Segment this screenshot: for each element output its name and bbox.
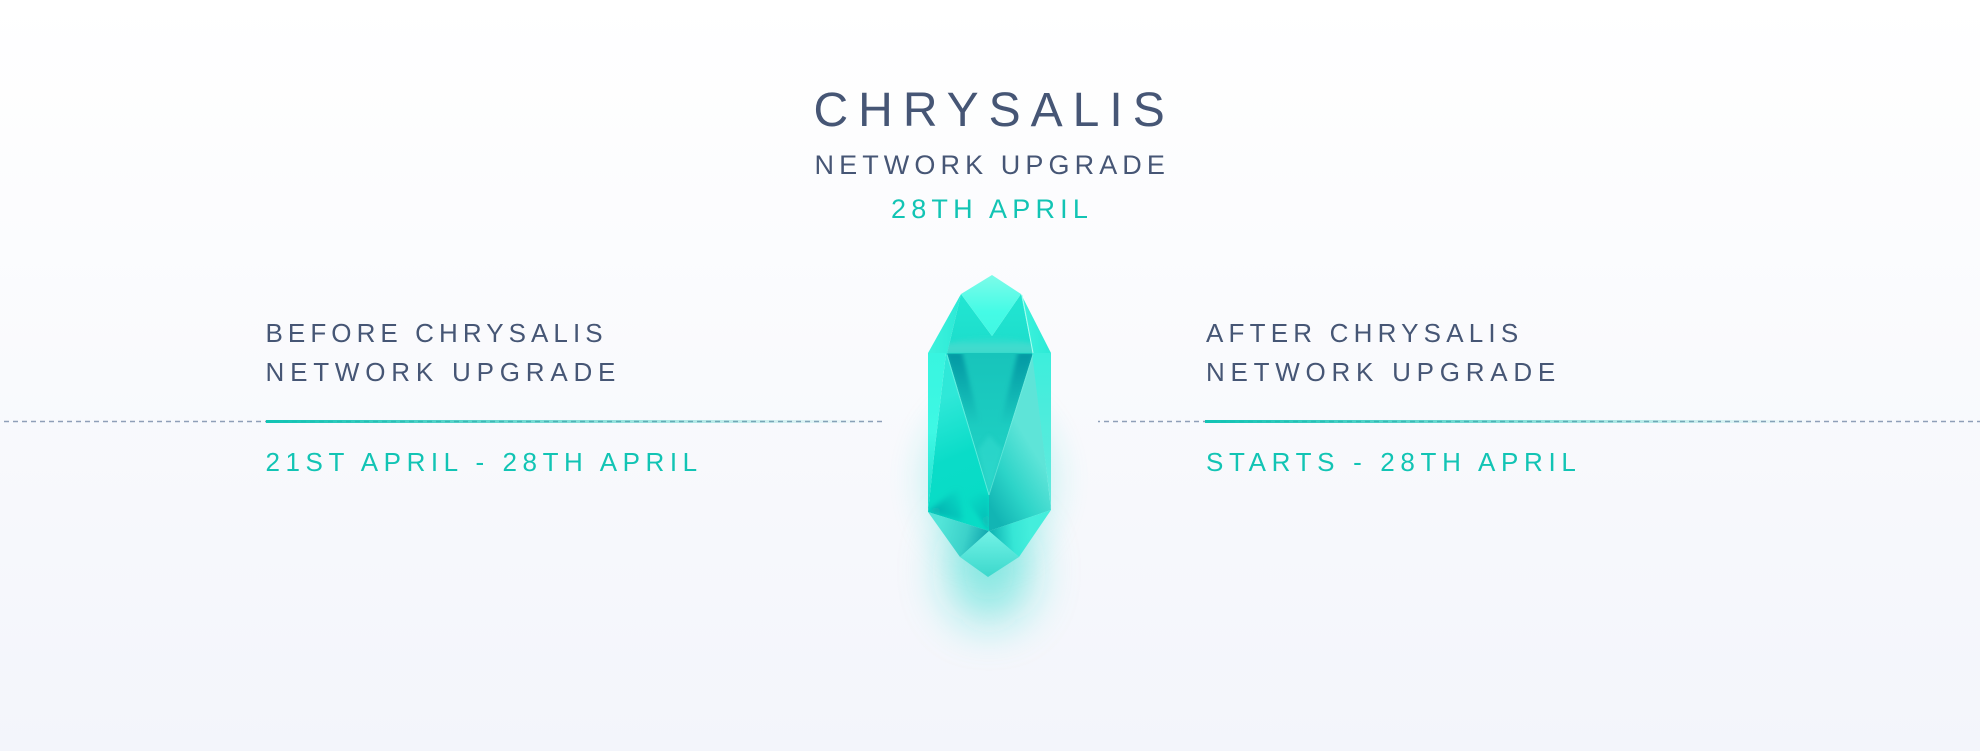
crystal body	[928, 352, 1051, 531]
crystal top cap	[928, 275, 1051, 354]
before heading	[266, 318, 621, 387]
title block	[814, 84, 1175, 224]
panel: before upgrade	[0, 318, 882, 477]
after date range: STARTS - 28TH APRIL	[1206, 447, 1582, 477]
dashed timeline left	[0, 420, 882, 422]
before heading: NETWORK UPGRADE	[266, 357, 621, 387]
crystal bottom facets	[928, 510, 1051, 577]
after heading: AFTER CHRYSALIS	[1206, 318, 1523, 348]
before date range: 21ST APRIL - 28TH APRIL	[266, 447, 703, 477]
after heading	[1206, 318, 1561, 387]
after heading: NETWORK UPGRADE	[1206, 357, 1561, 387]
icon: crystal	[919, 275, 1059, 622]
upgrade date: 28TH APRIL	[891, 194, 1093, 224]
dashed timeline right	[1098, 420, 1980, 422]
panel: after upgrade	[1098, 318, 1980, 477]
title: CHRYSALIS	[814, 84, 1175, 137]
solid gradient line right	[1205, 420, 1820, 423]
before heading: BEFORE CHRYSALIS	[266, 318, 608, 348]
solid gradient line left	[266, 420, 882, 423]
subtitle: NETWORK UPGRADE	[814, 150, 1170, 180]
crystal glow	[919, 395, 1059, 622]
